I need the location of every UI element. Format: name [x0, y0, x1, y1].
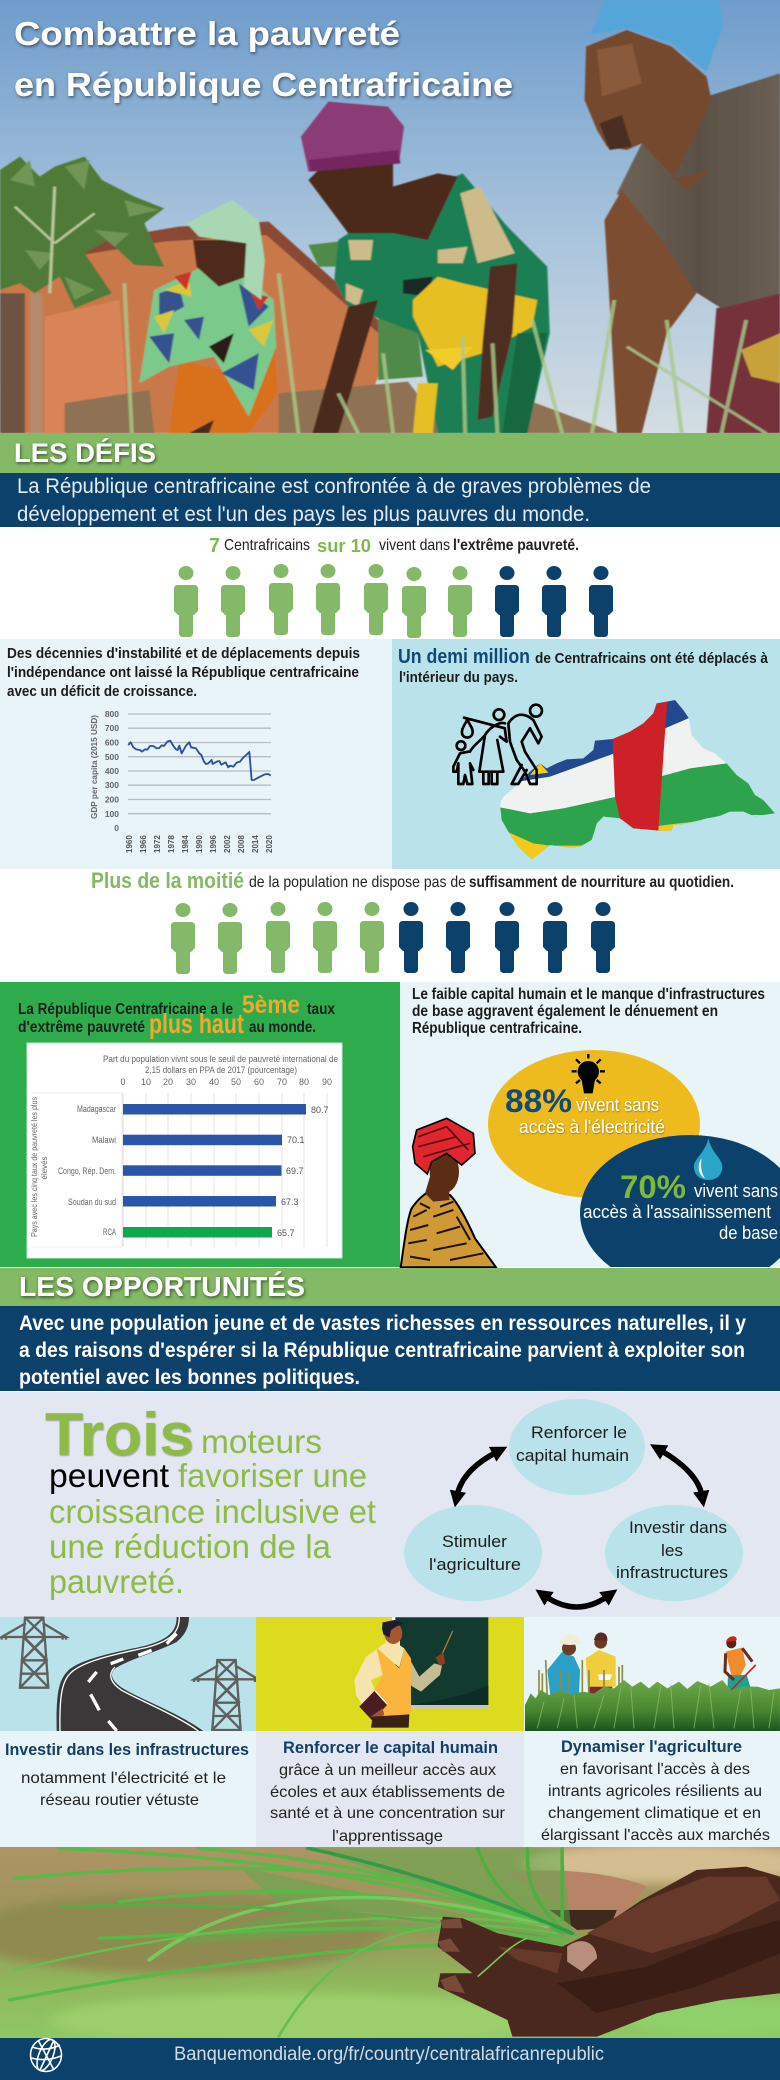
text: dynamiser l'agriculture: en favorisant l'accès à des: [560, 1761, 750, 1778]
band: défis intro text: développement et est l'un des pays les plus pauvres du monde.: [17, 503, 590, 526]
stat: 7 sur 10: Centrafricains: [224, 537, 310, 554]
bar chart: poverty rates: élevés: [40, 1156, 49, 1180]
bubble: electricity: accès à l'électricité: [519, 1117, 665, 1137]
text: investir dans les infrastructures: notamment l'électricité et le: [21, 1770, 226, 1787]
arrow: top to right: [660, 1450, 702, 1496]
line chart: GDP per capita: 200: [105, 794, 119, 804]
line chart: GDP per capita: 2008: [237, 835, 246, 853]
bubble: sanitation: accès à l'assainissement: [583, 1202, 771, 1222]
line chart: GDP per capita: 800: [105, 709, 119, 719]
stat: 7 sur 10: [209, 535, 579, 557]
line chart: GDP per capita: 400: [105, 766, 119, 776]
bar chart: poverty rates: 0: [120, 1077, 126, 1087]
stat: 7 sur 10: l'extrême pauvreté.: [453, 537, 579, 554]
line chart: GDP per capita: 1978: [167, 835, 176, 853]
arrow: left to right: [545, 1596, 608, 1607]
icon: world bank globe: [30, 2037, 62, 2073]
pictogram: 7 of 10 people: [174, 564, 613, 638]
displaced text: Un demi million: [398, 646, 530, 668]
panel: human capital and infrastructure: [400, 982, 780, 1291]
growth text: l'indépendance ont laissé la République centrafricaine: [7, 664, 359, 681]
three drivers statement: favoriser une: [178, 1457, 367, 1494]
bar chart: poverty rates: 80: [299, 1077, 309, 1087]
text: renforcer le capital humain: grâce à un meilleur accès aux: [279, 1762, 496, 1779]
cycle: renforcer le capital humain: [509, 1399, 645, 1495]
displaced text: [398, 646, 769, 686]
cycle: renforcer le capital humain: capital humain: [516, 1446, 629, 1465]
line chart: GDP per capita: 2020: [265, 835, 274, 853]
rank text: [18, 991, 335, 1039]
human capital text: [412, 986, 765, 1037]
text: dynamiser l'agriculture: [524, 1731, 780, 1847]
line chart: GDP per capita: 1972: [153, 835, 162, 853]
hero photo: three women farming: [0, 0, 780, 433]
icon: light bulb: [572, 1054, 605, 1093]
line chart: GDP per capita: 700: [105, 723, 119, 733]
text: investir dans les infrastructures: Investir dans les infrastructures: [5, 1740, 249, 1759]
icon: water drop: [694, 1138, 722, 1180]
panel: displaced people: [392, 639, 780, 869]
bubble: electricity: vivent sans: [576, 1095, 659, 1115]
middle woman: [301, 102, 550, 433]
line chart: GDP per capita: [90, 709, 274, 853]
house: [0, 222, 393, 433]
cycle: investir dans les infrastructures: [605, 1505, 743, 1601]
line chart: GDP per capita: 0: [114, 823, 119, 833]
map: flag-coloured country: [497, 697, 780, 867]
line chart: GDP per capita: 2002: [223, 835, 232, 853]
title: Combattre la pauvreté: [14, 15, 400, 52]
human capital text: République centrafricaine.: [412, 1020, 582, 1037]
cycle: renforcer le capital humain: Renforcer le: [531, 1423, 627, 1442]
left woman: [139, 200, 278, 433]
line chart: GDP per capita: 300: [105, 780, 119, 790]
bubble: electricity: [488, 1050, 700, 1198]
band: opportunités intro text: [0, 1306, 780, 1391]
bar chart: poverty rates: [27, 1043, 342, 1258]
title: [14, 15, 513, 103]
bar chart: poverty rates: Congo, Rép. Dem.: [58, 1166, 116, 1176]
cycle: investir dans les infrastructures: infrastructures: [616, 1563, 728, 1582]
bubble: electricity: 88%: [505, 1083, 572, 1119]
text: dynamiser l'agriculture: changement climatique et en: [548, 1805, 761, 1822]
stat: 7 sur 10: sur 10: [317, 536, 371, 556]
bar chart: poverty rates: 10: [141, 1077, 151, 1087]
stat: 7 sur 10: 7: [209, 535, 220, 557]
bar chart: poverty rates: 30: [186, 1077, 196, 1087]
text: renforcer le capital humain: [256, 1731, 524, 1847]
line chart: GDP per capita: GDP per capita (2015 USD): [90, 715, 99, 819]
bubble: sanitation: [580, 1135, 780, 1267]
text: dynamiser l'agriculture: Dynamiser l'agriculture: [561, 1737, 742, 1756]
bar chart: poverty rates: 50: [231, 1077, 241, 1087]
thatch: [65, 382, 617, 433]
band: les défis heading: LES DÉFIS: [14, 437, 156, 468]
bubble: sanitation: 70%: [620, 1169, 686, 1205]
three drivers statement: une réduction de la: [49, 1528, 332, 1565]
bar chart: poverty rates: Soudan du sud: [68, 1197, 116, 1207]
rank text: taux: [307, 1001, 335, 1018]
bar chart: poverty rates: 40: [209, 1077, 219, 1087]
panel: three drivers: [0, 1392, 780, 1617]
three drivers statement: moteurs: [201, 1423, 322, 1460]
rank text: 5ème: [242, 991, 300, 1019]
band: les opportunités heading: [0, 1268, 780, 1306]
line chart: GDP per capita: 1996: [209, 835, 218, 853]
tile image: farmers in field: [524, 1617, 780, 1731]
band: opportunités intro text: potentiel avec les bonnes politiques.: [19, 1366, 360, 1389]
illustration: woman with turban: [401, 1118, 496, 1267]
photo: hands holding seedling: [0, 1843, 780, 2047]
cycle: stimuler l'agriculture: l'agriculture: [429, 1555, 521, 1574]
growth text: avec un déficit de croissance.: [7, 683, 197, 700]
displaced text: l'intérieur du pays.: [399, 669, 518, 686]
text: renforcer le capital humain: Renforcer le capital humain: [283, 1738, 498, 1757]
papaya tree: [0, 157, 164, 308]
title: en République Centrafricaine: [14, 66, 513, 103]
band: les opportunités heading: LES OPPORTUNITÉS: [19, 1271, 305, 1302]
rank text: d'extrême pauvreté: [18, 1019, 145, 1036]
panel: extreme poverty rank: [0, 982, 400, 1267]
stat: plus de la moitié: de la population ne dispose pas de: [249, 874, 466, 891]
pictogram: 5 of 10 people: [171, 902, 615, 974]
bar chart: poverty rates: Malawi: [92, 1135, 116, 1145]
bar chart: poverty rates: 69.7: [286, 1166, 304, 1176]
stat: plus de la moitié: Plus de la moitié: [91, 868, 244, 893]
stat: plus de la moitié: suffisamment de nourriture au quotidien.: [469, 874, 734, 891]
cycle: stimuler l'agriculture: [404, 1505, 542, 1601]
text: investir dans les infrastructures: réseau routier vétuste: [40, 1792, 199, 1809]
line chart: GDP per capita: 2014: [251, 835, 260, 853]
rank text: plus haut: [149, 1008, 244, 1039]
background foliage: [308, 242, 423, 380]
three drivers statement: pauvreté.: [49, 1563, 184, 1600]
bar chart: poverty rates: Part du population vivnt sous le seuil de pauvreté international de: [103, 1054, 338, 1065]
stat: plus de la moitié: [91, 868, 734, 893]
three drivers statement: [45, 1401, 376, 1600]
text: renforcer le capital humain: santé et à une concentration sur: [270, 1805, 506, 1822]
footer band: [0, 2037, 780, 2080]
line chart: GDP per capita: 1960: [125, 835, 134, 853]
cycle: investir dans les infrastructures: les: [661, 1541, 683, 1560]
bar chart: poverty rates: 60: [254, 1077, 264, 1087]
text: investir dans les infrastructures: [0, 1731, 256, 1847]
stat: 7 sur 10: vivent dans: [379, 537, 450, 554]
human capital text: de base aggravent également le dénuement en: [412, 1003, 718, 1020]
text: renforcer le capital humain: l'apprentissage: [332, 1828, 443, 1845]
bar chart: poverty rates: 20: [163, 1077, 173, 1087]
line chart: GDP per capita: 500: [105, 752, 119, 762]
three drivers statement: Trois: [45, 1401, 194, 1468]
right woman: [585, 0, 780, 433]
arrow: top to left: [457, 1452, 497, 1496]
three drivers statement: croissance inclusive et: [49, 1493, 376, 1530]
bar chart: poverty rates: 65.7: [277, 1228, 295, 1238]
growth text: [7, 645, 360, 700]
icon: displaced family: [453, 705, 542, 784]
bar chart: poverty rates: 2,15 dollars en PPA de 2017 (pourcentage): [145, 1065, 297, 1076]
three drivers statement: peuvent: [49, 1457, 169, 1494]
bar chart: poverty rates: 80.7: [311, 1105, 329, 1115]
growth text: Des décennies d'instabilité et de déplacements depuis: [7, 645, 360, 662]
bar chart: poverty rates: Madagascar: [77, 1104, 116, 1114]
line chart: GDP per capita: 600: [105, 738, 119, 748]
cycle: investir dans les infrastructures: Investir dans: [629, 1518, 727, 1537]
line chart: GDP per capita: 1990: [195, 835, 204, 853]
bar chart: poverty rates: Pays avec les cinq taux de pauvreté les plus: [30, 1097, 39, 1237]
bar chart: poverty rates: 67.3: [281, 1197, 299, 1207]
tile image: road and pylons: [0, 1617, 258, 1731]
line chart: GDP per capita: 1984: [181, 835, 190, 853]
line chart: GDP per capita: 100: [105, 809, 119, 819]
band: les défis heading: [0, 433, 780, 473]
tile image: teacher at chalkboard: [256, 1617, 524, 1731]
website link text: Banquemondiale.org/fr/country/centralafricanrepublic: [174, 2044, 604, 2065]
text: dynamiser l'agriculture: intrants agricoles résilients au: [548, 1783, 762, 1800]
text: renforcer le capital humain: écoles et aux établissements de: [270, 1784, 505, 1801]
line chart: GDP per capita: 1966: [139, 835, 148, 853]
bar chart: poverty rates: RCA: [103, 1227, 116, 1237]
rank text: au monde.: [249, 1019, 316, 1036]
grass blades: [124, 273, 766, 433]
text: dynamiser l'agriculture: élargissant l'accès aux marchés: [541, 1827, 770, 1844]
rank text: La République Centrafricaine a le: [18, 1001, 233, 1018]
bar chart: poverty rates: 70: [277, 1077, 287, 1087]
cycle: stimuler l'agriculture: Stimuler: [442, 1532, 507, 1551]
panel: growth deficit: [0, 639, 392, 869]
band: défis intro text: [0, 473, 780, 527]
band: défis intro text: La République centrafricaine est confrontée à de graves problèmes de: [17, 475, 651, 498]
bar chart: poverty rates: 70.1: [287, 1135, 305, 1145]
bar chart: poverty rates: 90: [322, 1077, 332, 1087]
